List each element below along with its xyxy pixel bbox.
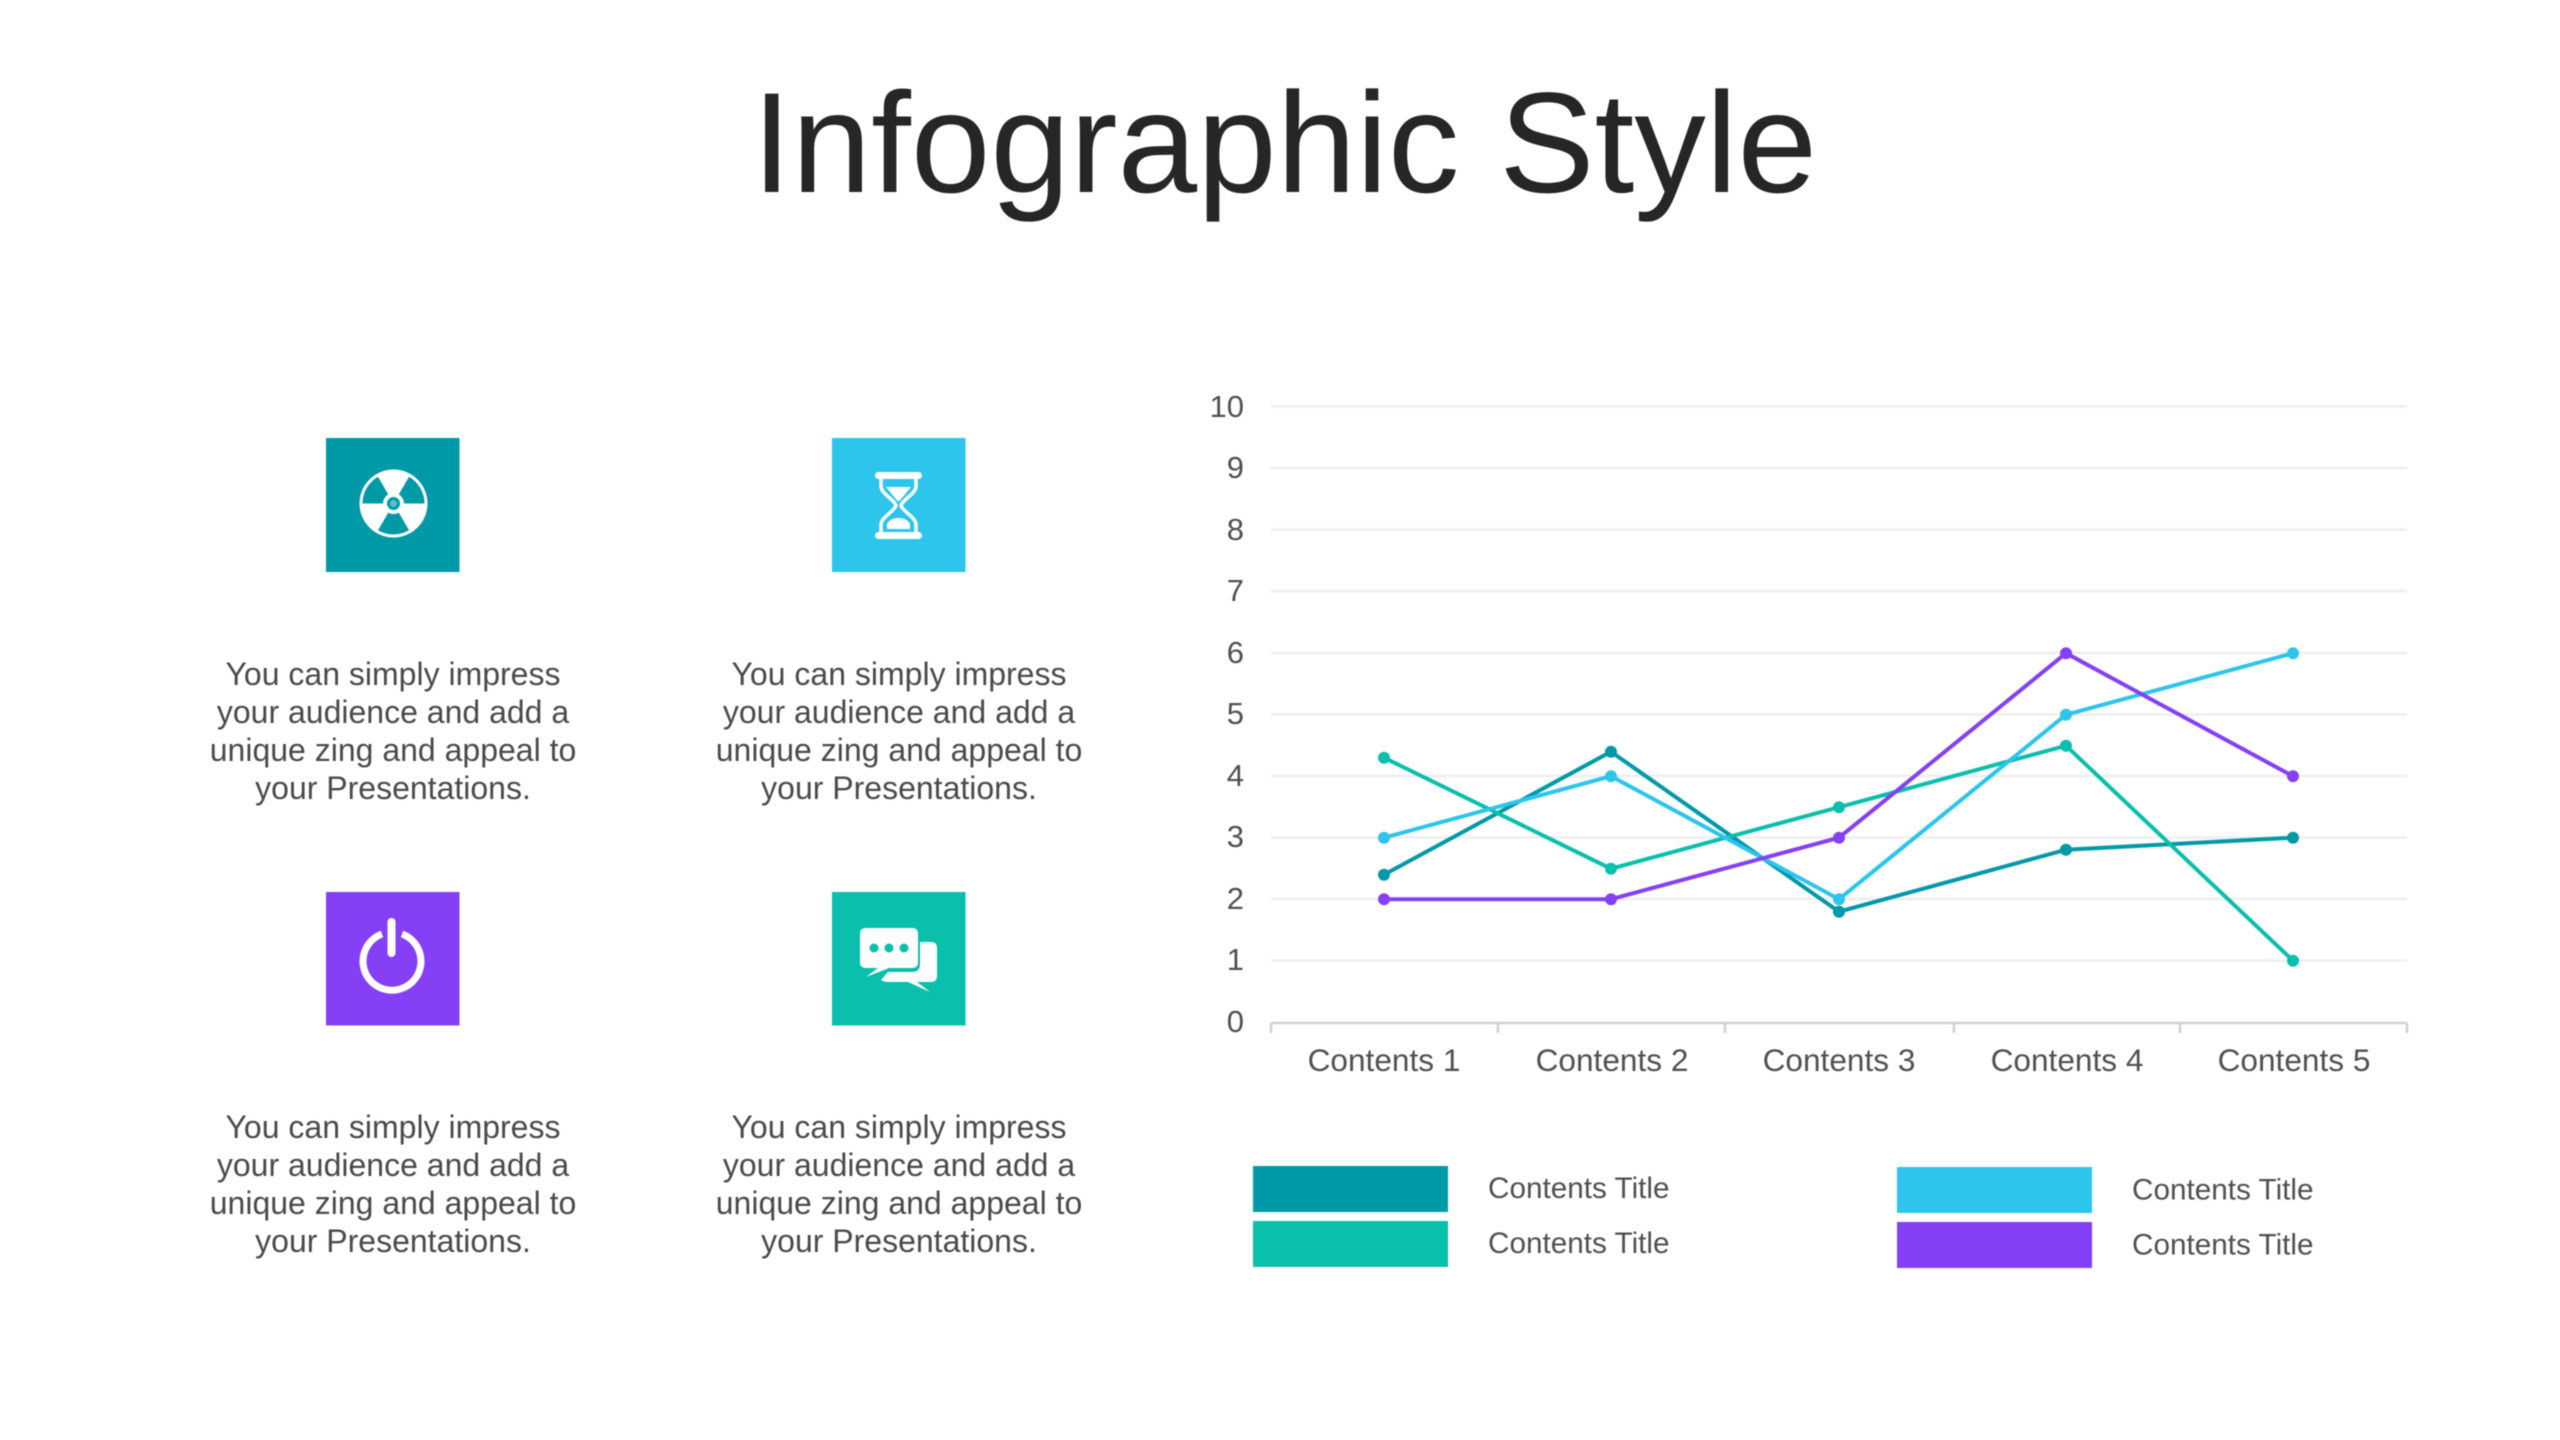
legend [1253,1166,2314,1268]
text block: hourglass feature: your Presentations. [761,770,1037,806]
text block: chat feature: You can simply impress [732,1109,1066,1145]
legend item: blue [1897,1167,2314,1213]
series: green [1378,740,2299,967]
text block: hourglass feature: unique zing and appeal to [716,732,1082,768]
series: purple [1378,647,2299,905]
panel: radiation feature [210,438,576,806]
icon: power [326,892,460,1026]
y axis labels: 8 [1227,512,1244,547]
x axis labels [1308,1042,2370,1078]
panel: hourglass feature [716,438,1082,806]
y axis labels: 7 [1227,573,1244,608]
y axis labels: 3 [1227,819,1244,854]
title: Infographic Style [752,64,1817,223]
icon: hourglass [832,438,966,572]
y axis labels: 2 [1227,881,1244,916]
y axis labels: 10 [1210,389,1244,424]
y axis labels: 6 [1227,635,1244,670]
legend item: green: Contents Title [1488,1227,1670,1260]
legend item: teal [1253,1166,1670,1212]
text block: radiation feature: your Presentations. [255,770,531,806]
text block: radiation feature: You can simply impress [226,656,560,692]
x axis labels: Contents 4 [1991,1042,2143,1078]
y axis labels [1210,389,1244,1039]
text block: radiation feature: your audience and add a [217,694,569,730]
legend item: teal: Contents Title [1488,1172,1670,1205]
text block: chat feature: your audience and add a [723,1147,1075,1183]
legend item: purple: Contents Title [2132,1228,2314,1262]
y axis labels: 0 [1227,1004,1244,1039]
y axis labels: 4 [1227,758,1244,793]
series: blue [1378,647,2299,905]
legend item: purple [1897,1222,2314,1268]
x axis labels: Contents 1 [1308,1042,1460,1078]
icon: radiation [326,438,460,572]
x axis labels: Contents 3 [1763,1042,1915,1078]
y axis labels: 9 [1227,450,1244,485]
x axis labels: Contents 5 [2218,1042,2370,1078]
panel: power feature [210,892,576,1259]
panel: chat feature [716,892,1082,1259]
text block: chat feature: your Presentations. [761,1223,1037,1259]
text block: power feature: your Presentations. [255,1223,531,1259]
y axis labels: 1 [1227,942,1244,977]
text block: radiation feature: unique zing and appeal to [210,732,576,768]
x axis labels: Contents 2 [1536,1042,1688,1078]
text block: power feature: your audience and add a [217,1147,569,1183]
text block: hourglass feature: You can simply impress [732,656,1066,692]
y axis labels: 5 [1227,696,1244,731]
icon: chat bubbles [832,892,966,1026]
series: teal [1378,746,2299,918]
legend item: green [1253,1221,1670,1267]
legend item: blue: Contents Title [2132,1174,2314,1206]
text block: power feature: You can simply impress [226,1109,560,1145]
line chart [1210,389,2407,1078]
text block: chat feature: unique zing and appeal to [716,1185,1082,1221]
text block: hourglass feature: your audience and add a [723,694,1075,730]
text block: power feature: unique zing and appeal to [210,1185,576,1221]
